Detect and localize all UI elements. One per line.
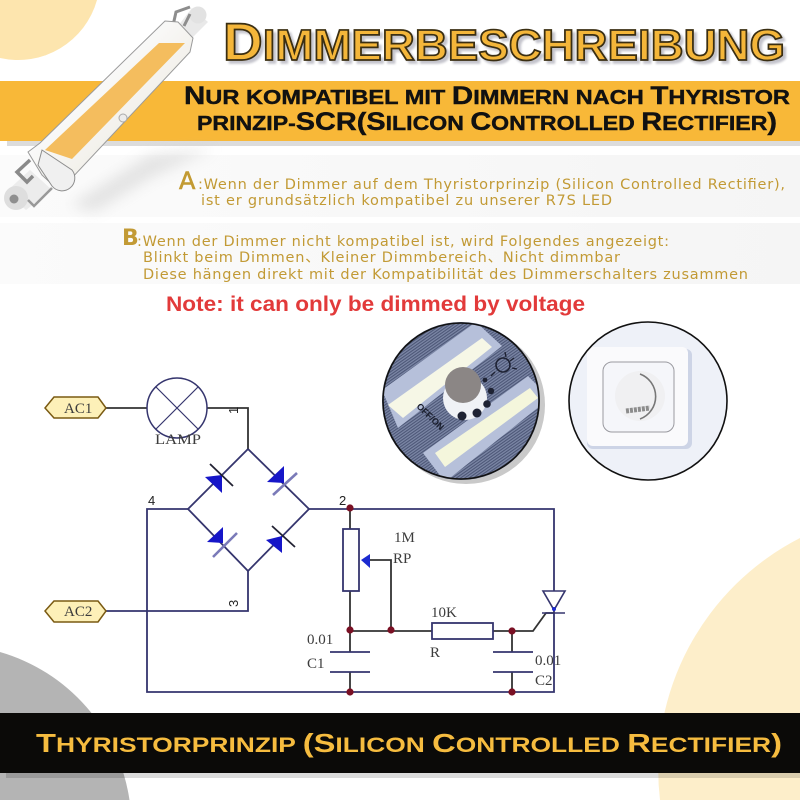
text B line 3: Diese hängen direkt mit der Kompatibilität des Dimmerschalters zusammen bbox=[143, 267, 748, 283]
decorative circle: right cream bbox=[658, 538, 800, 800]
subtitle line 1: NUR KOMPATIBEL MIT DIMMERN NACH THYRISTOR bbox=[184, 82, 791, 110]
subtitle line 2: PRINZIP- SCR(S ILICON CONTROLLED RECTIFIER ) bbox=[197, 108, 777, 136]
capacitor labels: C2 bbox=[535, 673, 553, 689]
circuit diagram bbox=[45, 378, 565, 696]
bulb bottom ceramic end bbox=[4, 160, 52, 210]
text A line 2: ist er grundsätzlich kompatibel zu unserer R7S LED bbox=[201, 193, 612, 209]
bulb top ceramic end bbox=[172, 6, 208, 38]
text B line 2: Blinkt beim Dimmen、Kleiner Dimmbereich、Nicht dimmbar bbox=[143, 250, 620, 266]
resistor R: R bbox=[430, 645, 440, 661]
text B line 1: :Wenn der Dimmer nicht kompatibel ist, wird Folgendes angezeigt: bbox=[137, 234, 669, 250]
photo: wall dimmer switch bbox=[569, 322, 727, 480]
potentiometer RP: RP bbox=[393, 551, 411, 567]
resistor R bbox=[430, 605, 493, 661]
bulb glass tube bbox=[28, 21, 193, 187]
thyristor symbol bbox=[542, 591, 565, 613]
lamp symbol bbox=[147, 378, 207, 448]
capacitor labels: C1 bbox=[307, 656, 325, 672]
label AC2 bbox=[45, 601, 106, 622]
panel: text B background bbox=[0, 223, 800, 284]
decorative circle: top-left cream bbox=[0, 0, 97, 60]
panel: orange subtitle band bbox=[0, 81, 800, 146]
capacitor labels: 0.01 bbox=[535, 653, 561, 669]
icon: R7S LED bulb bbox=[4, 6, 208, 210]
label AC1: AC1 bbox=[64, 401, 92, 417]
bulb pinch nub bbox=[119, 114, 127, 122]
text A line 1: :Wenn der Dimmer auf dem Thyristorprinzip (Silicon Controlled Rectifier), bbox=[198, 177, 785, 193]
letter B: B bbox=[122, 226, 139, 251]
note text: Note: it can only be dimmed by voltage bbox=[166, 293, 585, 316]
bulb shadow bbox=[70, 148, 215, 212]
node numbers bbox=[148, 407, 346, 607]
potentiometer RP: 1M bbox=[394, 530, 415, 546]
panel: bottom black band bbox=[0, 713, 800, 778]
wires bbox=[106, 408, 554, 692]
bulb COB strip bbox=[45, 43, 185, 159]
capacitor labels: 0.01 bbox=[307, 632, 333, 648]
node numbers: 3 bbox=[226, 600, 241, 607]
bottom band text: THYRISTORPRINZIP (S ILICON CONTROLLED RECTIFIER ) bbox=[36, 728, 782, 758]
letter A: A bbox=[179, 167, 196, 195]
junction dots bbox=[346, 504, 516, 696]
label AC1 bbox=[45, 397, 106, 418]
label AC2: AC2 bbox=[64, 604, 92, 620]
text block A bbox=[179, 167, 785, 209]
photo: bulb dimmer close-up: OFF/ON bbox=[415, 401, 446, 432]
title: DIMMERBESCHREIBUNG bbox=[223, 13, 785, 72]
photo: bulb dimmer close-up bbox=[380, 320, 550, 485]
capacitor labels bbox=[307, 632, 561, 689]
node numbers: 1 bbox=[226, 407, 241, 414]
text block B bbox=[122, 226, 748, 283]
resistor R: 10K bbox=[431, 605, 457, 621]
decorative circle: bottom-left grey bbox=[0, 652, 130, 800]
lamp symbol: LAMP bbox=[155, 432, 201, 448]
panel: text A background bbox=[0, 155, 800, 217]
node numbers: 2 bbox=[339, 493, 346, 508]
potentiometer RP bbox=[343, 529, 415, 591]
bridge diodes bbox=[205, 464, 297, 557]
bulb lower end cap bbox=[38, 150, 75, 191]
node numbers: 4 bbox=[148, 493, 155, 508]
